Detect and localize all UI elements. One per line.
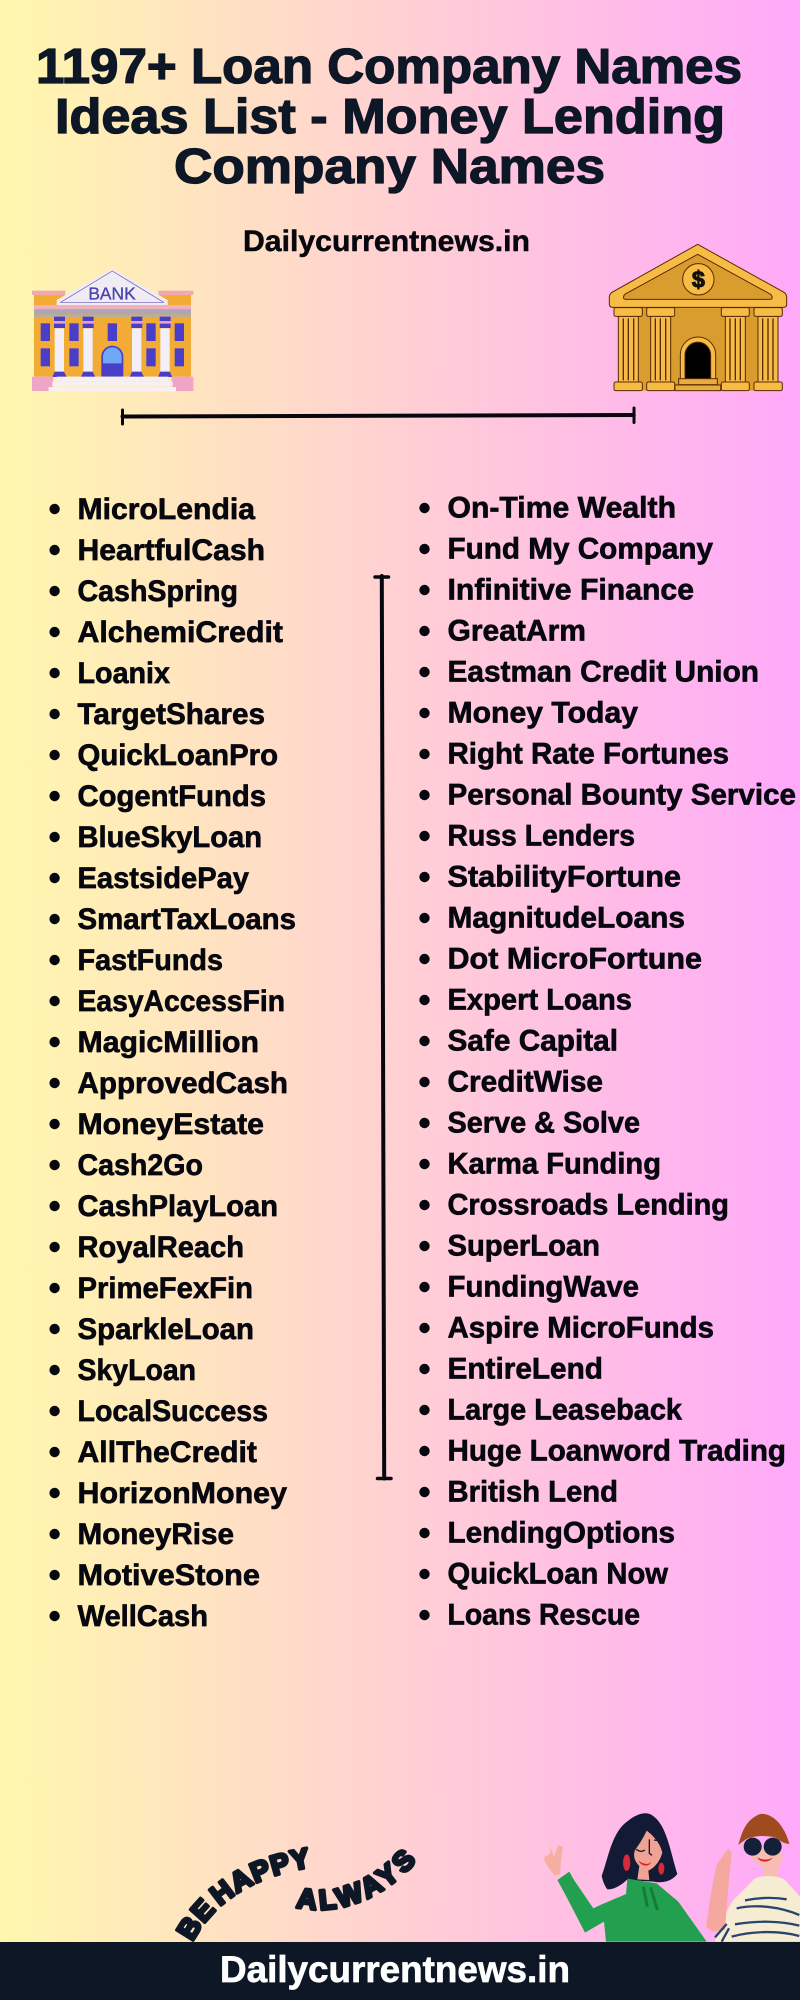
item: QuickLoanPro: QuickLoanPro xyxy=(78,739,278,772)
item: EastsidePay: EastsidePay xyxy=(78,862,249,895)
item: Dot MicroFortune: Dot MicroFortune xyxy=(448,942,702,976)
item: MoneyRise: MoneyRise xyxy=(78,1518,234,1551)
item: AlchemiCredit: AlchemiCredit xyxy=(78,616,283,649)
item: Karma Funding: Karma Funding xyxy=(448,1148,661,1180)
figure: woman in sunglasses and striped top xyxy=(706,1814,800,1942)
curved slogan: be happy always: ALWAYS xyxy=(294,1849,416,1912)
item: MagicMillion: MagicMillion xyxy=(78,1026,259,1059)
item: LendingOptions: LendingOptions xyxy=(448,1516,675,1550)
item: MotiveStone: MotiveStone xyxy=(78,1559,260,1592)
item: CashSpring: CashSpring xyxy=(78,575,238,608)
item: Right Rate Fortunes: Right Rate Fortunes xyxy=(448,738,729,770)
item: GreatArm: GreatArm xyxy=(448,614,586,648)
item: MoneyEstate: MoneyEstate xyxy=(78,1108,264,1141)
title: Ideas List - Money Lending xyxy=(55,90,725,144)
item: HorizonMoney: HorizonMoney xyxy=(78,1477,287,1510)
item: CreditWise: CreditWise xyxy=(448,1066,603,1098)
item: EntireLend: EntireLend xyxy=(448,1352,603,1386)
item: Huge Loanword Trading: Huge Loanword Trading xyxy=(448,1434,786,1468)
item: Loans Rescue: Loans Rescue xyxy=(448,1598,640,1632)
item: HeartfulCash: HeartfulCash xyxy=(78,534,265,567)
divider: vertical bar between columns xyxy=(375,576,391,1478)
item: PrimeFexFin: PrimeFexFin xyxy=(78,1272,253,1305)
item: SmartTaxLoans: SmartTaxLoans xyxy=(78,903,296,936)
item: BlueSkyLoan: BlueSkyLoan xyxy=(78,821,262,854)
item: LocalSuccess: LocalSuccess xyxy=(78,1395,268,1428)
footer bar xyxy=(0,1942,800,2000)
item: On-Time Wealth: On-Time Wealth xyxy=(448,492,676,524)
item: ApprovedCash: ApprovedCash xyxy=(78,1067,288,1100)
item: Fund My Company: Fund My Company xyxy=(448,532,713,566)
item: SkyLoan: SkyLoan xyxy=(78,1354,196,1387)
item: MagnitudeLoans: MagnitudeLoans xyxy=(448,902,685,934)
item: Russ Lenders: Russ Lenders xyxy=(448,820,635,852)
item: SuperLoan: SuperLoan xyxy=(448,1230,600,1262)
divider: horizontal bar with end caps xyxy=(122,408,634,424)
figure: woman in green xyxy=(544,1813,707,1942)
curved slogan: be happy always xyxy=(175,1846,416,1942)
item: Loanix: Loanix xyxy=(78,657,170,690)
item: Cash2Go: Cash2Go xyxy=(78,1149,203,1182)
item: FastFunds: FastFunds xyxy=(78,944,223,977)
item: Aspire MicroFunds: Aspire MicroFunds xyxy=(448,1312,714,1344)
illustration: two happy women xyxy=(544,1813,800,1942)
item: Safe Capital: Safe Capital xyxy=(448,1024,618,1058)
item: Infinitive Finance: Infinitive Finance xyxy=(448,574,694,606)
item: WellCash: WellCash xyxy=(78,1600,208,1633)
item: CashPlayLoan: CashPlayLoan xyxy=(78,1190,278,1223)
icon: colourful bank building xyxy=(32,268,193,391)
icon: gold bank with dollar sign: $ xyxy=(692,266,705,292)
footer text: site name: Dailycurrentnews.in xyxy=(220,1949,570,1990)
item: Large Leaseback: Large Leaseback xyxy=(448,1394,682,1426)
item: MicroLendia: MicroLendia xyxy=(78,493,255,526)
item: British Lend: British Lend xyxy=(448,1476,618,1508)
item: SparkleLoan: SparkleLoan xyxy=(78,1313,254,1346)
item: EasyAccessFin: EasyAccessFin xyxy=(78,985,285,1018)
icon: colourful bank building: BANK xyxy=(88,283,136,303)
item: TargetShares: TargetShares xyxy=(78,698,265,731)
item: Crossroads Lending: Crossroads Lending xyxy=(448,1188,729,1222)
list: left column of company names xyxy=(49,493,296,1633)
list: right column of company names xyxy=(419,492,796,1632)
subtitle: site name: Dailycurrentnews.in xyxy=(243,225,530,258)
item: AllTheCredit: AllTheCredit xyxy=(78,1436,257,1469)
title: 1197+ Loan Company Names xyxy=(36,40,742,94)
icon: gold bank with dollar sign xyxy=(609,244,787,391)
item: Personal Bounty Service: Personal Bounty Service xyxy=(448,778,796,812)
item: FundingWave: FundingWave xyxy=(448,1270,639,1304)
item: Expert Loans: Expert Loans xyxy=(448,984,632,1016)
title xyxy=(36,40,742,194)
item: CogentFunds: CogentFunds xyxy=(78,780,266,813)
item: Serve & Solve: Serve & Solve xyxy=(448,1106,640,1140)
item: StabilityFortune: StabilityFortune xyxy=(448,860,681,894)
title: Company Names xyxy=(174,140,605,194)
item: RoyalReach: RoyalReach xyxy=(78,1231,244,1264)
item: Eastman Credit Union: Eastman Credit Union xyxy=(448,656,759,688)
item: QuickLoan Now: QuickLoan Now xyxy=(448,1558,669,1590)
curved slogan: be happy always: BE HAPPY xyxy=(175,1846,308,1942)
item: Money Today: Money Today xyxy=(448,696,638,730)
